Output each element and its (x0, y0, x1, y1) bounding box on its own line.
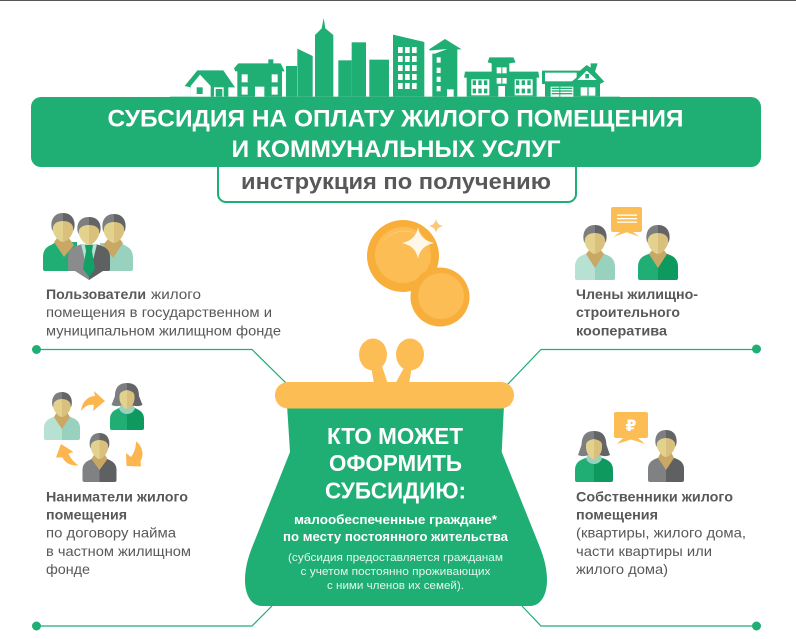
bag bold text: малообеспеченные граждане* (294, 513, 497, 527)
text: users: Пользователи (46, 286, 146, 302)
arrow right (126, 442, 142, 466)
person gray (82, 433, 116, 482)
text: tenants: по договору найма (46, 524, 176, 540)
text: owners: части квартиры или (576, 543, 712, 559)
bag heading: СУБСИДИЮ: (325, 478, 466, 504)
person green (638, 225, 678, 280)
connector lines (32, 344, 761, 630)
text: owners (576, 488, 746, 577)
text: users: жилого (151, 286, 201, 302)
wallet bag (245, 338, 547, 606)
text: cooperative members: Члены жилищно- (576, 286, 698, 302)
text: owners: помещения (576, 506, 658, 522)
bag note: (субсидия предоставляется гражданам (288, 552, 503, 564)
title line 2: И КОММУНАЛЬНЫХ УСЛУГ (232, 136, 561, 163)
arrow left (56, 444, 78, 466)
person left, green (43, 213, 77, 271)
icon: coins (367, 219, 470, 326)
icon: cooperative members (575, 207, 678, 280)
person mint (44, 392, 80, 440)
speech bubble (611, 207, 642, 237)
text: cooperative members: кооператива (576, 322, 667, 338)
text: tenants: фонде (46, 561, 90, 577)
person right, mint (100, 214, 133, 271)
bag bold text (283, 513, 509, 544)
text: cooperative members (576, 286, 698, 338)
person woman green (110, 383, 144, 430)
bag note: с ними членов их семей). (327, 580, 464, 592)
small coin (410, 268, 470, 326)
text: users (46, 286, 281, 338)
text: owners: (квартиры, жилого дома, (576, 524, 746, 540)
person woman green (575, 431, 613, 482)
bag bold text: по месту постоянного жительства (283, 530, 509, 544)
title line 1: СУБСИДИЯ НА ОПЛАТУ ЖИЛОГО ПОМЕЩЕНИЯ (108, 106, 684, 132)
bag note (288, 552, 503, 592)
text: users: муниципальном жилищном фонде (46, 322, 281, 338)
text: tenants: помещения (46, 506, 127, 522)
bag heading: ОФОРМИТЬ (329, 450, 462, 476)
text: cooperative members: строительного (576, 304, 680, 320)
icon: three people (43, 213, 133, 280)
person centre with suit and tie (68, 217, 110, 280)
text: tenants: Наниматели жилого (46, 488, 188, 504)
person mint (575, 225, 615, 280)
bag note: с учетом постоянно проживающих (300, 566, 491, 578)
text: users: помещения в государственном и (46, 304, 272, 320)
text: tenants (46, 488, 191, 577)
bag heading: КТО МОЖЕТ (327, 423, 463, 449)
title banner (31, 97, 761, 167)
text: owners: Собственники жилого (576, 488, 733, 504)
bag clasp (275, 338, 514, 408)
icon: city skyline (170, 18, 620, 101)
icon: tenants exchange (44, 383, 144, 482)
subtitle text: инструкция по получению (241, 169, 551, 194)
sparkle large (402, 227, 434, 259)
icon: owners (575, 412, 684, 482)
arrow top (81, 391, 105, 411)
person gray (648, 430, 684, 482)
big coin (367, 220, 439, 292)
bag body (245, 405, 547, 606)
text: owners: жилого дома) (576, 561, 668, 577)
subtitle box (218, 150, 576, 202)
bag heading (325, 423, 466, 504)
text: tenants: в частном жилищном (46, 543, 191, 559)
ruble bubble: ₽ (625, 418, 637, 435)
sparkle small (429, 219, 443, 233)
